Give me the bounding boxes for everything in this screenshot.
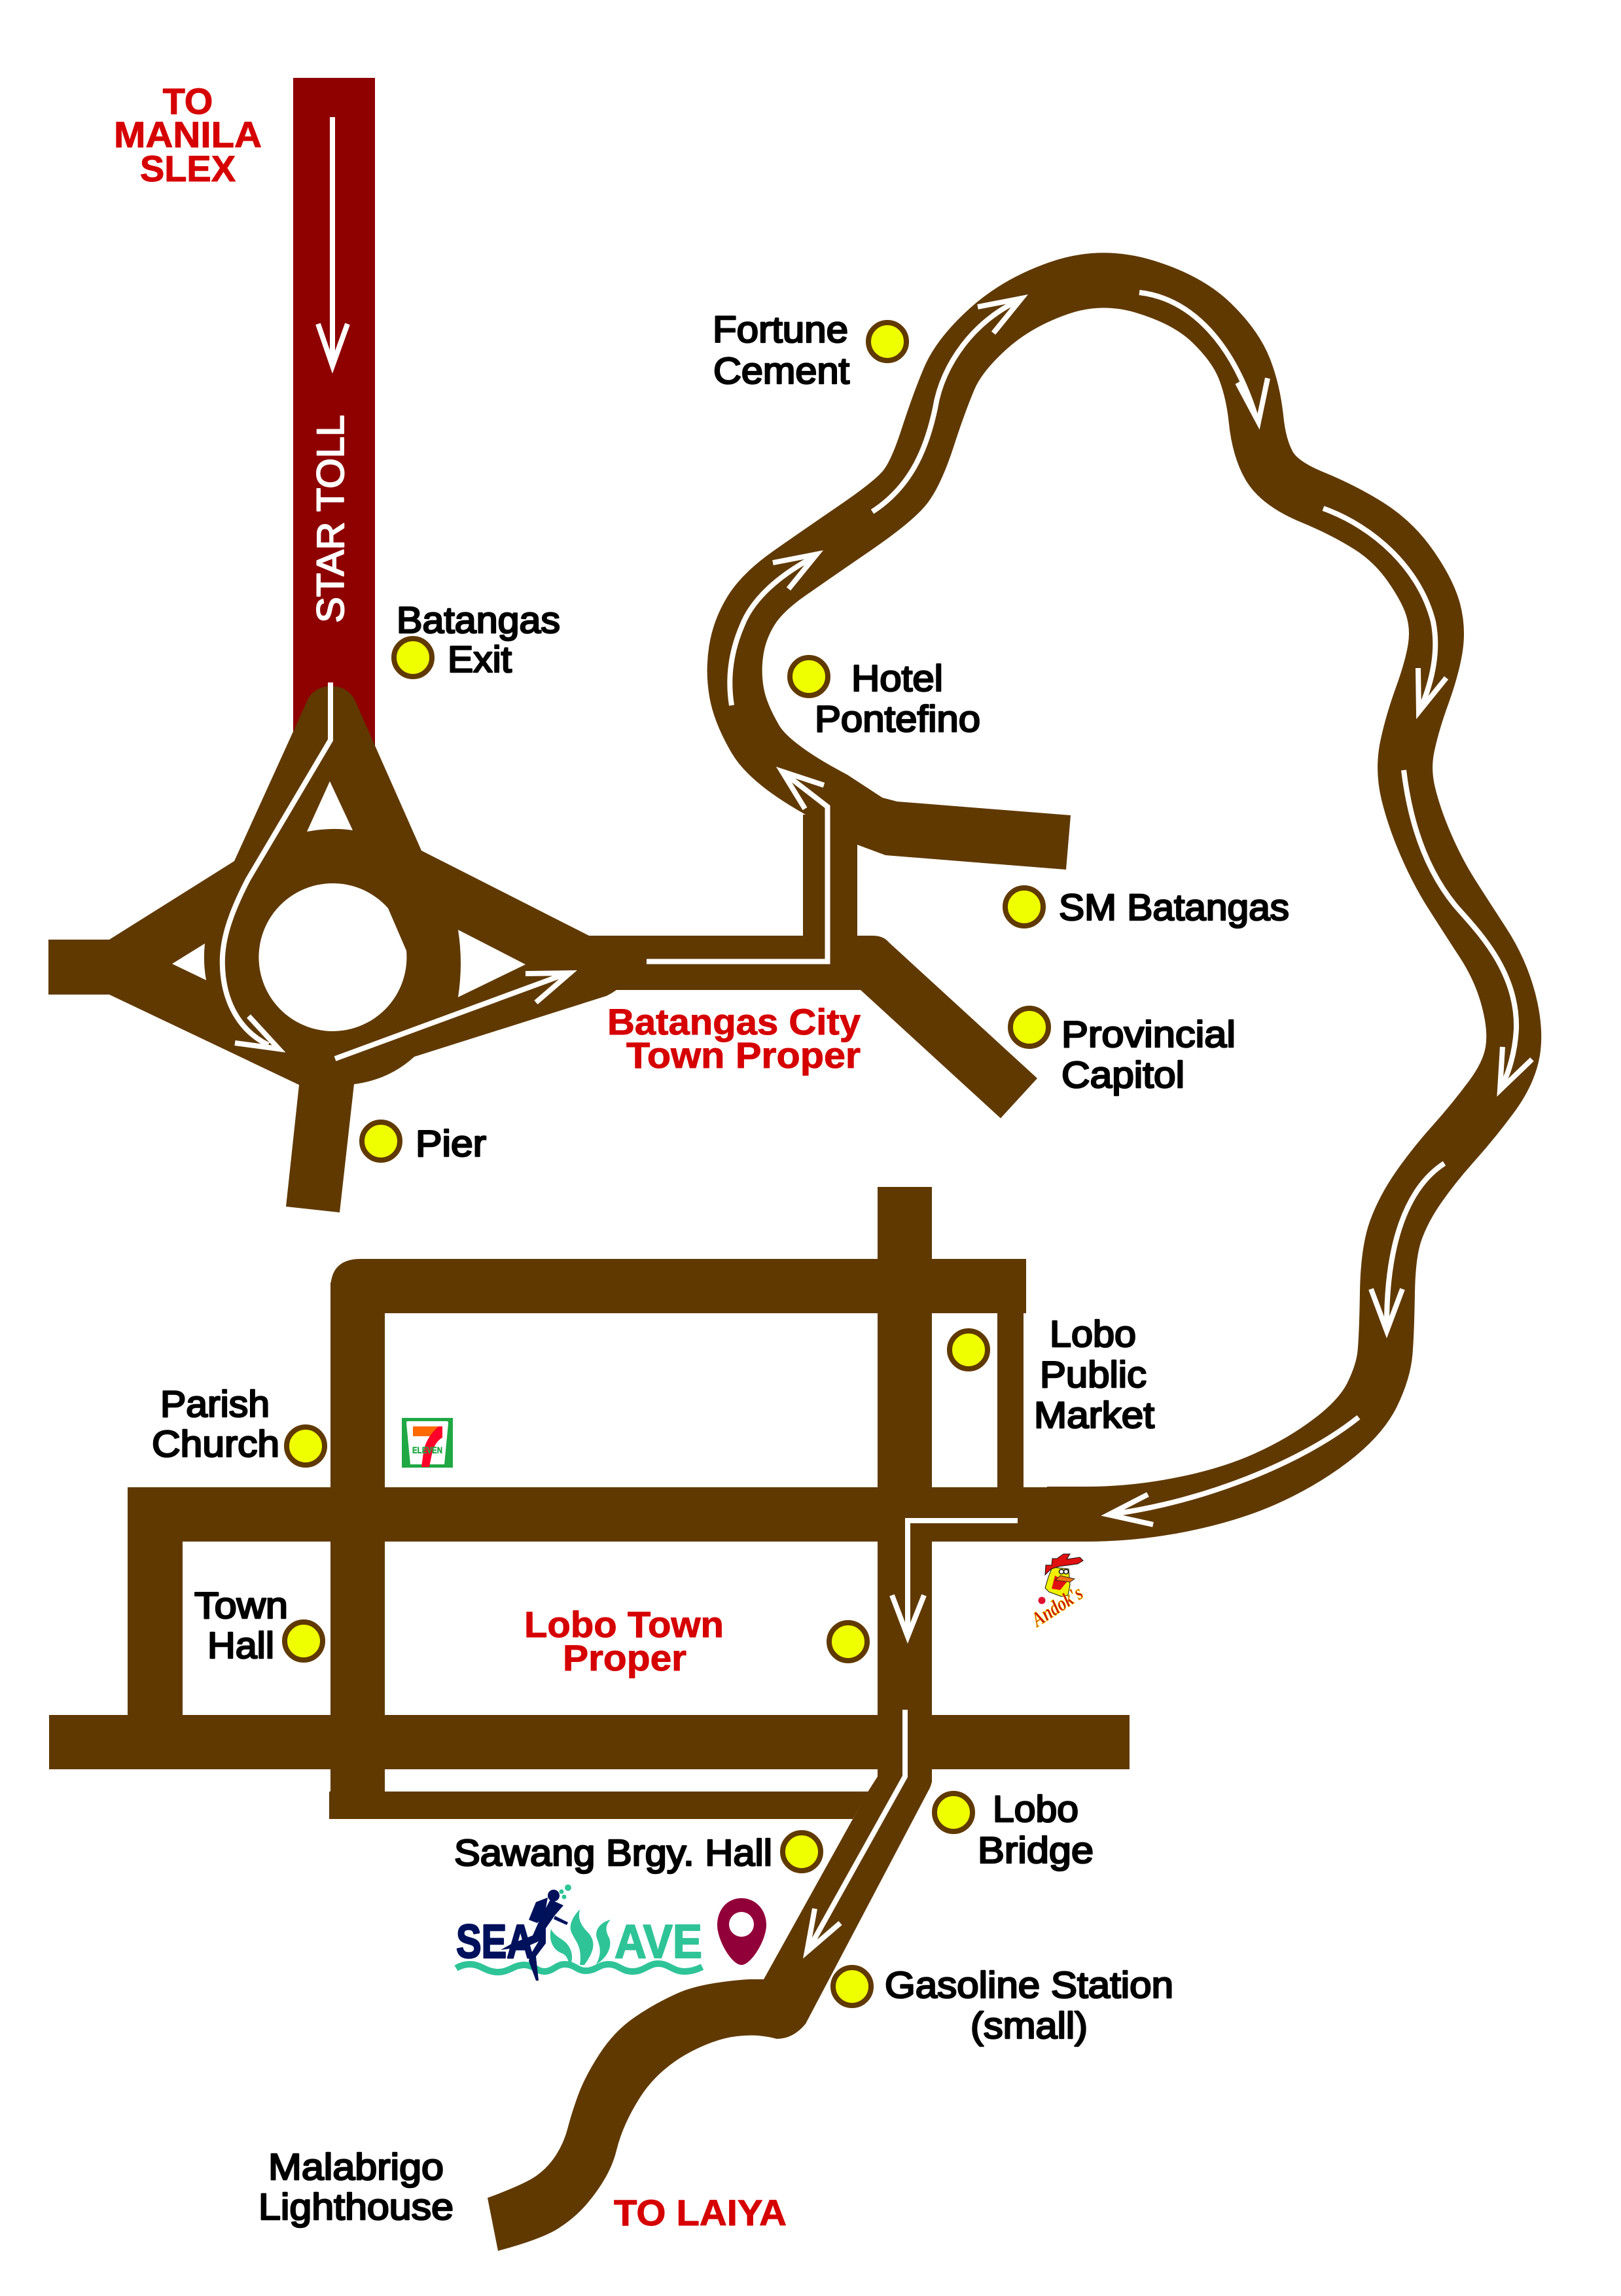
label: fortune cement: Cement bbox=[713, 350, 849, 392]
label: provincial capitol bbox=[1061, 1014, 1236, 1096]
heading: to manila slex: SLEX bbox=[140, 148, 236, 189]
label: malabrigo lighthouse: Lighthouse bbox=[258, 2186, 454, 2228]
white route arrows bbox=[223, 117, 1532, 1952]
label: malabrigo lighthouse: Malabrigo bbox=[268, 2146, 444, 2188]
logo bubbles bbox=[559, 1884, 571, 1899]
label: to laiya: TO LAIYA bbox=[614, 2192, 787, 2233]
roundabout junction bbox=[48, 686, 628, 1212]
label: gasoline station: (small) bbox=[971, 2005, 1088, 2047]
upper brown road network bbox=[48, 280, 1514, 1514]
label: parish church: Church bbox=[152, 1423, 279, 1465]
heading: to manila slex: MANILA bbox=[114, 114, 262, 155]
star toll label: STAR TOLL bbox=[310, 415, 352, 623]
label: batangas exit: Batangas bbox=[397, 599, 560, 641]
marker: lobo town proper bbox=[829, 1623, 867, 1661]
north-south road to market bbox=[878, 1187, 932, 1782]
far left street bbox=[128, 1487, 183, 1723]
label: parish church: Parish bbox=[160, 1383, 270, 1425]
road to SM Batangas bbox=[831, 779, 1071, 870]
marker: hotel pontefino bbox=[790, 658, 828, 696]
logo text: sea: SEA bbox=[456, 1916, 534, 1968]
marker: lobo bridge bbox=[935, 1793, 972, 1831]
label: town hall bbox=[194, 1585, 288, 1667]
market side street bbox=[997, 1309, 1024, 1492]
road stub north of town proper bbox=[803, 815, 857, 965]
label: town hall: Town bbox=[194, 1585, 288, 1627]
sawang street bbox=[329, 1792, 868, 1819]
label: lobo bridge: Lobo bbox=[993, 1788, 1078, 1830]
marker: lobo public market bbox=[950, 1331, 988, 1369]
label: lobo town proper: Lobo Town bbox=[524, 1604, 724, 1645]
label: gasoline station: Gasoline Station bbox=[885, 1964, 1173, 2006]
heading: to manila slex: TO bbox=[163, 80, 213, 122]
label: gasoline station bbox=[885, 1964, 1173, 2047]
label: sm batangas: SM Batangas bbox=[1059, 887, 1289, 928]
logo wave bbox=[456, 1964, 702, 1972]
arrow: town proper north bbox=[647, 771, 827, 962]
icon: andok's logo bbox=[1026, 1554, 1087, 1632]
arrow: star toll south bbox=[318, 117, 347, 366]
arrow: winding 5 bbox=[1404, 770, 1532, 1090]
label: lobo public market bbox=[1034, 1313, 1154, 1436]
lower cross street bbox=[49, 1715, 1130, 1769]
label: lobo bridge: Bridge bbox=[978, 1829, 1094, 1871]
logo text: ave: AVE bbox=[615, 1916, 702, 1968]
arrow: main street turn south bbox=[892, 1521, 1018, 1636]
label: provincial capitol: Provincial bbox=[1061, 1014, 1236, 1055]
icon: 7-eleven logo bbox=[402, 1418, 453, 1468]
label: lobo bridge bbox=[978, 1788, 1094, 1871]
logo seaweed bbox=[550, 1909, 611, 1965]
marker: batangas exit bbox=[394, 639, 432, 677]
marker: gasoline station bbox=[833, 1968, 871, 2005]
road to provincial capitol bbox=[576, 936, 1037, 1118]
marker: provincial capitol bbox=[1010, 1008, 1048, 1046]
arrow: winding 7 bbox=[1109, 1417, 1359, 1525]
winding road bbox=[735, 280, 1514, 1514]
marker: town hall bbox=[285, 1622, 323, 1660]
label: lobo town proper: Proper bbox=[563, 1637, 686, 1678]
label: batangas city town proper: Town Proper bbox=[626, 1034, 861, 1076]
label: provincial capitol: Capitol bbox=[1061, 1054, 1185, 1096]
label: lobo public market: Lobo bbox=[1050, 1313, 1136, 1355]
marker: parish church bbox=[287, 1427, 325, 1465]
icon: andok's logo: Andok's bbox=[1026, 1581, 1087, 1632]
label: pier: Pier bbox=[416, 1123, 486, 1165]
arrow: winding 1 bbox=[730, 554, 817, 705]
main street bbox=[128, 1487, 1050, 1542]
label: batangas exit: Exit bbox=[448, 639, 512, 680]
label: hotel pontefino: Hotel bbox=[851, 658, 943, 699]
arrow: to laiya bbox=[807, 1710, 905, 1952]
top street bbox=[330, 1259, 1026, 1313]
logo diver bbox=[501, 1890, 568, 1981]
label: batangas exit bbox=[397, 599, 560, 680]
marker: fortune cement bbox=[868, 323, 906, 361]
arrow: winding 4 bbox=[1323, 508, 1446, 712]
icon: location pin bbox=[717, 1898, 766, 1965]
label: parish church bbox=[152, 1383, 279, 1465]
arrow: winding 2 bbox=[872, 298, 1022, 512]
label: lobo town proper bbox=[524, 1604, 724, 1678]
label: fortune cement bbox=[713, 309, 849, 392]
label: hotel pontefino bbox=[815, 658, 980, 740]
label: malabrigo lighthouse bbox=[258, 2146, 454, 2228]
landmark markers bbox=[285, 323, 1048, 2005]
label: batangas city town proper bbox=[607, 1001, 861, 1076]
label: lobo public market: Market bbox=[1034, 1394, 1154, 1436]
label: town hall: Hall bbox=[207, 1625, 274, 1667]
label: hotel pontefino: Pontefino bbox=[815, 698, 980, 740]
logo: sea save bbox=[456, 1884, 702, 1981]
left street bbox=[330, 1282, 385, 1818]
heading: to manila slex bbox=[114, 80, 262, 189]
road to laiya bbox=[488, 1767, 932, 2251]
label: sawang brgy hall: Sawang Brgy. Hall bbox=[454, 1832, 772, 1874]
label: lobo public market: Public bbox=[1040, 1354, 1147, 1396]
arrow: into roundabout bbox=[223, 682, 330, 1049]
arrow: winding 3 bbox=[1139, 292, 1268, 422]
marker: sm batangas bbox=[1005, 888, 1043, 926]
lobo town road grid bbox=[49, 1187, 1130, 2251]
arrow: winding 6 bbox=[1371, 1163, 1444, 1331]
marker: sawang brgy hall bbox=[783, 1833, 821, 1871]
arrow: out of roundabout bbox=[335, 973, 570, 1059]
icon: 7-eleven logo: ELEVEN bbox=[412, 1445, 442, 1455]
label: fortune cement: Fortune bbox=[713, 309, 848, 351]
star toll road bbox=[293, 78, 375, 771]
label: batangas city town proper: Batangas City bbox=[607, 1001, 861, 1042]
marker: pier bbox=[362, 1122, 400, 1160]
